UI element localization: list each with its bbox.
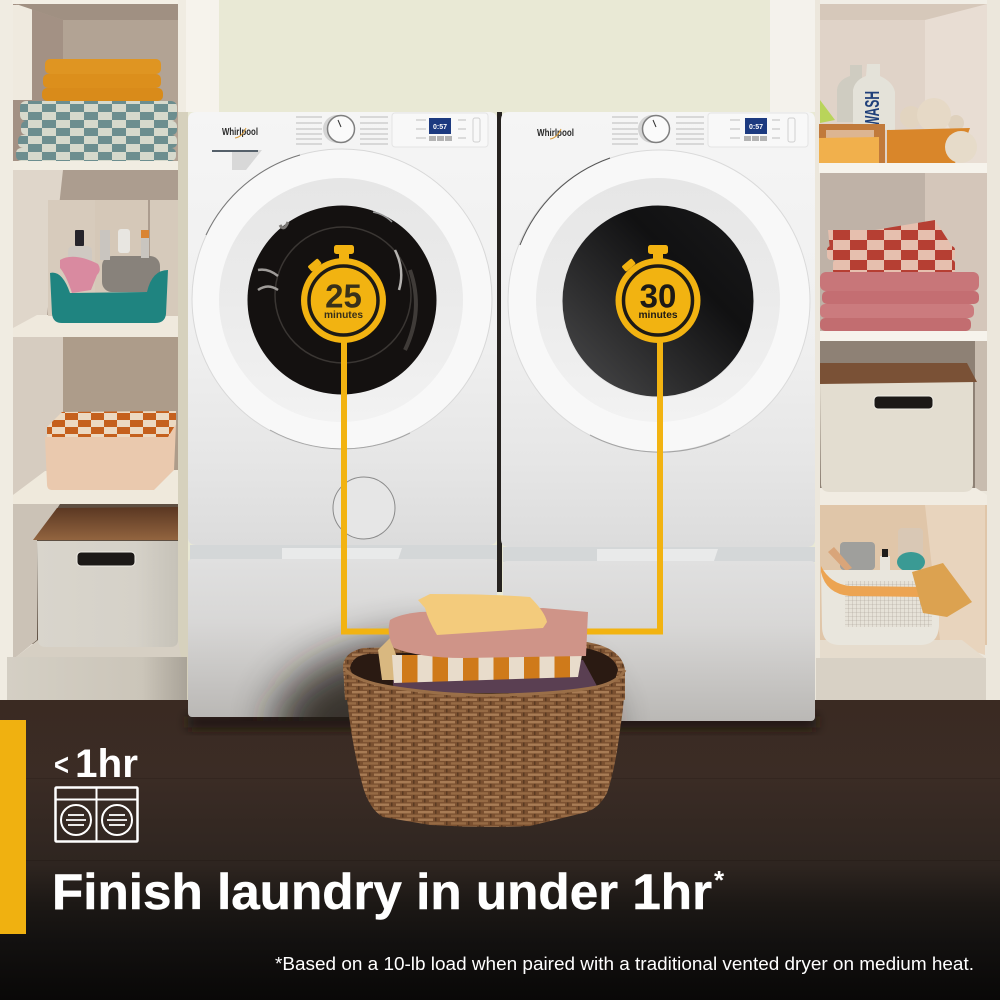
white storage box with wood lid — [33, 507, 178, 647]
washer body — [188, 112, 497, 545]
teal checked towels — [16, 101, 177, 161]
timer: 25 minutes: minutes — [324, 310, 363, 321]
timer: 30 minutes — [616, 245, 700, 343]
basket rim — [344, 668, 625, 695]
headline asterisk: * — [714, 865, 725, 895]
teal basket — [50, 270, 168, 323]
pink cloth — [60, 257, 100, 293]
washer pedestal — [188, 545, 497, 717]
panel: left shelving unit — [0, 0, 219, 702]
whirlpool logo: Whirlpool — [537, 128, 574, 139]
icon: washer and dryer pair — [55, 787, 138, 842]
striped towel — [378, 638, 582, 683]
timer: 25 minutes: 25 — [325, 278, 362, 314]
WASH label: WASH — [862, 91, 884, 127]
basket back rim — [343, 642, 625, 700]
purple towel — [393, 660, 597, 693]
white basket with orange band — [821, 528, 972, 645]
pink towels — [820, 272, 979, 331]
headline: Finish laundry in under 1hr — [52, 864, 712, 920]
under one hour label: < — [54, 747, 69, 782]
orange bowl with dryer balls — [887, 98, 977, 163]
dryer door — [508, 150, 810, 452]
under one hour label: 1hr — [75, 742, 138, 786]
timer: 30 minutes: 30 — [640, 278, 676, 314]
pink towel — [389, 608, 588, 658]
control panel — [296, 113, 488, 147]
green leaf — [820, 100, 835, 123]
timer: 25 minutes — [301, 245, 386, 343]
yellow towel — [418, 594, 547, 635]
panel: floor — [0, 700, 1000, 1000]
footnote: *Based on a 10-lb load when paired with a traditional vented dryer on medium heat. — [275, 954, 974, 974]
storage files and bottles — [48, 200, 178, 316]
orange tray — [819, 124, 885, 163]
peach basket with checked towel — [45, 411, 176, 490]
laundry basket with towels — [343, 594, 625, 827]
cover plate circle — [333, 477, 395, 539]
bottles — [837, 64, 895, 130]
dryer dial — [638, 115, 670, 143]
panel: washer — [188, 112, 497, 717]
whirlpool logo: Whirlpool — [222, 127, 258, 138]
control panel — [612, 113, 808, 147]
control panel: 0:57 — [433, 124, 447, 131]
control panel: 0:57 — [749, 124, 763, 131]
detergent drawer — [198, 148, 262, 170]
white storage box with wood lid — [820, 363, 977, 492]
red checked towels — [827, 220, 955, 274]
timer: 30 minutes: minutes — [638, 310, 678, 321]
panel: dryer — [497, 112, 815, 721]
basket body — [343, 668, 625, 827]
dryer pedestal — [503, 547, 815, 721]
yellow accent bar — [0, 720, 26, 934]
washer door — [192, 149, 492, 449]
dryer body — [501, 112, 815, 547]
basket cast shadow on pedestals — [244, 606, 636, 721]
connector line: timers to basket — [344, 340, 660, 632]
washer dial — [323, 115, 354, 143]
wall background — [0, 0, 1000, 720]
panel: right shelving unit — [770, 0, 1000, 702]
orange folded towels — [42, 59, 163, 101]
